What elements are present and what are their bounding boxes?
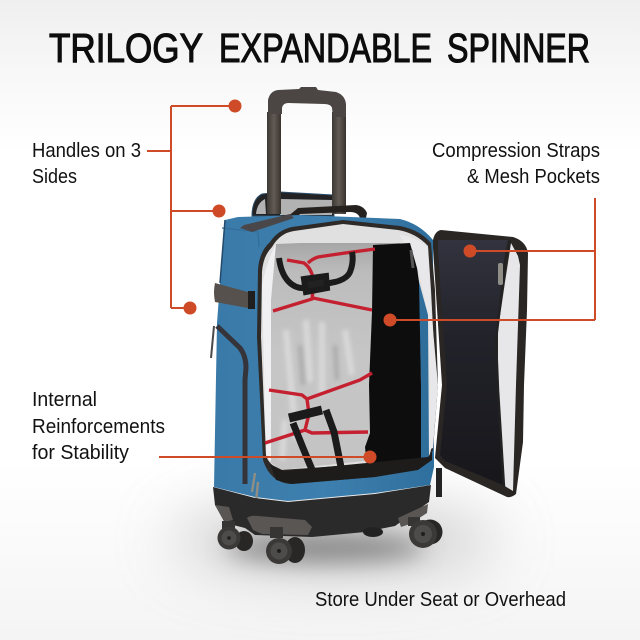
door shell (433, 230, 528, 497)
callout: handles on 3 sides (32, 100, 242, 314)
pocket zip line (496, 240, 510, 487)
zipper pull (498, 263, 503, 285)
interior lining (261, 224, 438, 470)
callout: compression straps and mesh pockets (384, 140, 600, 326)
markers (184, 100, 242, 314)
blue panel seam (222, 228, 259, 247)
lower frame (270, 452, 432, 484)
label: & Mesh Pockets (467, 166, 600, 188)
label: Sides (32, 166, 77, 188)
top strap (240, 214, 294, 232)
telescopic handle (267, 87, 346, 214)
interior frame (257, 220, 438, 484)
leader lines (147, 106, 235, 308)
side zipper (211, 326, 258, 502)
label: Internal (32, 389, 97, 411)
side handle (214, 283, 255, 309)
zipper tab (436, 468, 442, 497)
title: SPINNER (447, 25, 590, 71)
suitcase (211, 87, 528, 564)
door lining (438, 240, 508, 485)
top carry handle (286, 205, 367, 218)
mesh pocket (365, 243, 421, 468)
red reinforcement straps (265, 249, 375, 443)
black compression straps (279, 252, 353, 472)
label: Compression Straps (432, 140, 600, 162)
label: Handles on 3 (32, 140, 141, 162)
open front door (433, 230, 528, 497)
pocket zipper (411, 250, 413, 268)
title: TRILOGY (49, 25, 203, 71)
floor shadow (170, 502, 500, 578)
leader lines (390, 198, 595, 320)
leader line (159, 456, 370, 458)
markers (384, 244, 476, 326)
callout: internal reinforcements (32, 389, 376, 464)
caption: Store Under Seat or Overhead (315, 589, 566, 611)
blue inner strip (418, 278, 429, 462)
wheels (218, 517, 442, 564)
marker (364, 450, 376, 464)
suitcase blue body (214, 215, 434, 501)
label: for Stability (32, 442, 129, 464)
label: Reinforcements (32, 416, 165, 438)
wheel base (213, 485, 431, 537)
title: EXPANDABLE (219, 25, 432, 71)
white pocket edge (498, 243, 520, 491)
rear top pocket (252, 192, 334, 216)
